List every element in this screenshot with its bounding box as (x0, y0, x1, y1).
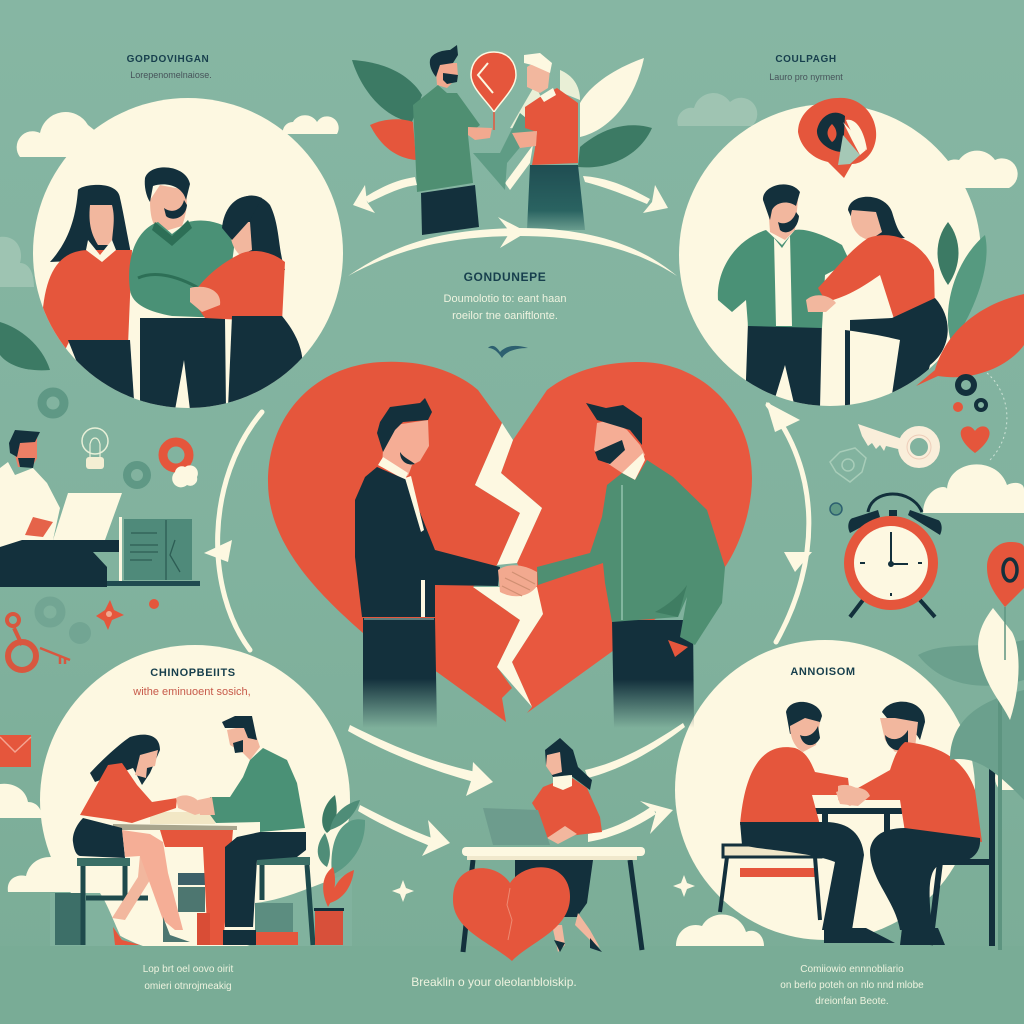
icon: alarm clock (844, 494, 942, 617)
text block: bottom left circle caption: withe eminuoent sosich, (132, 686, 251, 698)
text block: centre caption: Doumolotio to: eant haan (444, 293, 566, 305)
person: man with green shirt (718, 184, 850, 408)
heart crack upper (475, 423, 542, 565)
text block: top left caption (127, 54, 212, 80)
text block: centre caption: GONDUNEPE (464, 270, 546, 284)
text block: bottom right circle caption: ANNOISOM (790, 666, 856, 678)
text block: centre caption: roeilor tne oaniftlonte. (452, 310, 558, 322)
stool left (77, 858, 148, 945)
arrow: top left short (353, 177, 417, 213)
text block: bottom right caption: dreionfan Beote. (815, 996, 889, 1007)
heart right half (501, 362, 752, 713)
icon: location balloon (987, 542, 1024, 660)
icon: broken heart small (453, 867, 570, 961)
person: woman in red (806, 197, 948, 408)
icon: key right (858, 424, 934, 462)
leaf left dark (352, 60, 422, 122)
illustration: woman at laptop desk (453, 738, 645, 961)
text block: bottom left caption (143, 964, 234, 992)
decorative sparkles (392, 875, 695, 902)
arrow: top right short (583, 176, 668, 213)
table (113, 812, 237, 945)
text block: bottom right caption: on berlo poteh on nlo nnd mlobe (780, 980, 924, 991)
boxes under man (255, 903, 298, 945)
panel: top right circle (679, 98, 981, 408)
ring around the heart (218, 405, 809, 650)
illustration: central broken heart (268, 362, 752, 722)
icon: flower outline (830, 448, 866, 482)
plant: potted plant (314, 795, 365, 945)
icon: key left (7, 614, 70, 670)
person: man in green shirt (537, 403, 725, 728)
icon: envelope (0, 735, 31, 767)
person: woman left (42, 185, 134, 400)
person: man at table (198, 716, 306, 945)
ground band (0, 946, 1024, 1024)
arrow: lower left short (358, 805, 450, 856)
illustration: man at laptop left (0, 430, 200, 587)
icon: small heart (961, 426, 990, 453)
person: older man in red (512, 53, 585, 230)
text block: bottom right caption: Comiiowio ennnobliario (800, 964, 904, 975)
books under table (178, 873, 205, 912)
floor hills (86, 882, 324, 936)
plant: right foliage (918, 640, 1024, 950)
person: woman right (190, 196, 303, 408)
person: man in green (413, 45, 492, 235)
text block: top right caption: Lauro pro nyrment (769, 72, 843, 82)
heart left half (268, 362, 520, 722)
text block: bottom left caption: omieri otnrojmeakig (144, 981, 232, 992)
text block: centre caption (444, 270, 566, 322)
faint clouds (0, 93, 757, 287)
text block: bottom left circle caption: CHINOPBEIITS (150, 667, 236, 679)
person: man centre (129, 167, 236, 410)
icon: heart balloon (471, 52, 516, 130)
cream drape and paper (473, 70, 580, 190)
text block: top right caption (769, 54, 843, 82)
arrow: top long curve (348, 217, 677, 276)
leaf right dark (578, 125, 652, 167)
panel: top left circle (33, 98, 343, 410)
illustration: top handover scene (352, 45, 652, 235)
leaf right cream (580, 58, 644, 137)
gears right (953, 377, 986, 412)
text block: bottom centre caption: Breaklin o your oleolanbloiskip. (411, 975, 577, 989)
person: man in black suit (355, 398, 500, 728)
person: man left (740, 702, 895, 943)
icon: light bulb (82, 428, 108, 469)
text block: top left caption: GOPDOVIHGAN (127, 54, 209, 65)
dark box left (55, 893, 85, 945)
icon: small bird (488, 346, 528, 358)
stool right (257, 857, 313, 945)
text block: bottom right caption (780, 964, 924, 1007)
text block: bottom left circle caption (132, 667, 251, 698)
icon: gears left (39, 392, 198, 644)
dashed arc (987, 373, 1007, 460)
person: man right (836, 702, 982, 945)
text block: bottom left caption: Lop brt oel oovo oirit (143, 964, 234, 975)
panel: bottom right circle (675, 640, 992, 946)
person: woman with laptop (515, 738, 602, 952)
chair right (930, 758, 992, 946)
person: woman at table (73, 735, 205, 945)
icon: red speech bubble (798, 98, 876, 178)
text block: top left caption: Lorepenomelnaiose. (130, 70, 212, 80)
arrow: lower left long (348, 725, 493, 796)
table (810, 808, 902, 850)
panel: bottom left circle (40, 645, 365, 955)
text block: top right caption: COULPAGH (775, 54, 837, 65)
leaf left edge (0, 322, 50, 370)
plant: cream lily (978, 608, 1019, 720)
ring arrowheads (204, 402, 812, 572)
icon: handshake (498, 565, 537, 596)
arrow: lower right upper (585, 723, 685, 778)
leaves: right of top right circle (938, 222, 987, 345)
heart crack lower (473, 587, 543, 707)
leaf left red (370, 119, 416, 160)
laptop (483, 808, 550, 845)
big red leaf (916, 294, 1024, 386)
icon: small dot (830, 503, 842, 515)
chair left (720, 845, 821, 920)
arrow: lower right lower (588, 801, 673, 842)
desk (462, 847, 645, 952)
